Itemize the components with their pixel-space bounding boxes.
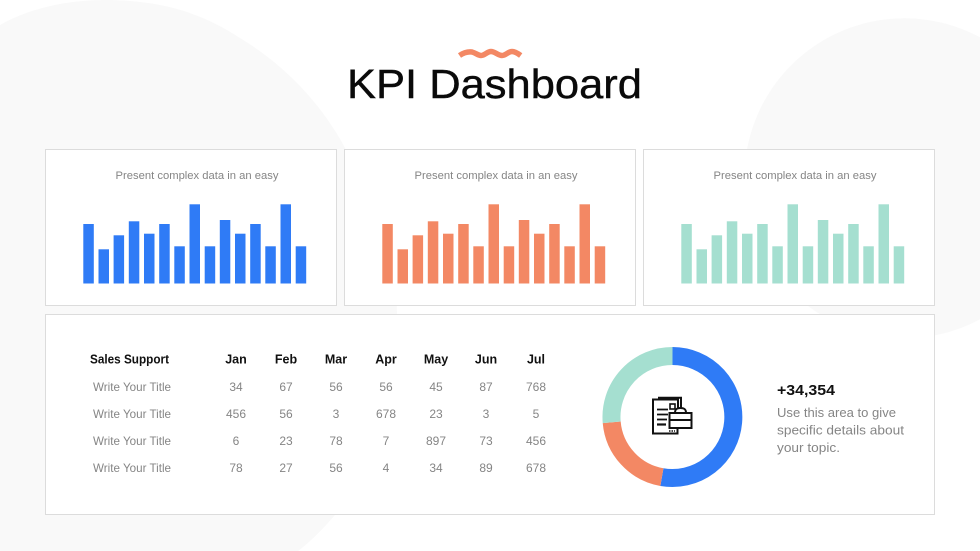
- table row 1: 87: [479, 380, 493, 394]
- table header row: Feb: [275, 352, 297, 366]
- table header row: May: [424, 352, 448, 366]
- table row 4: 27: [279, 461, 293, 475]
- table header row: Apr: [375, 352, 397, 366]
- icon: document and briefcase: [653, 398, 692, 434]
- table header row: Jul: [527, 352, 545, 366]
- panel: sales table and donut: [46, 314, 934, 514]
- table row 3: 7: [383, 434, 390, 448]
- panel: teal bar chart: [644, 150, 934, 306]
- table row 1: 56: [329, 380, 343, 394]
- callout: value and details: your topic.: [777, 440, 840, 455]
- table header row: Jun: [475, 352, 497, 366]
- table row 2: 3: [333, 407, 340, 421]
- table row 2: 5: [533, 407, 540, 421]
- table row 4: Write Your Title: [93, 461, 171, 475]
- panel caption: Present complex data in an easy: [714, 170, 877, 182]
- table row 3: 78: [329, 434, 343, 448]
- table row 3: 897: [426, 434, 446, 448]
- table row 1: 45: [429, 380, 443, 394]
- table row 2: 3: [483, 407, 490, 421]
- table row 2: [93, 407, 540, 421]
- table row 3: 73: [479, 434, 493, 448]
- bar chart: orange: [382, 204, 605, 284]
- table row 4: 89: [479, 461, 493, 475]
- table row 4: 4: [383, 461, 390, 475]
- table row 2: 456: [226, 407, 246, 421]
- table row 1: 34: [229, 380, 243, 394]
- donut chart: [611, 356, 733, 478]
- title: KPI Dashboard: [347, 61, 642, 107]
- table row 4: 34: [429, 461, 443, 475]
- table row 4: [93, 461, 546, 475]
- table: sales support: [90, 352, 546, 475]
- panel: blue bar chart: [46, 150, 336, 306]
- table row 1: Write Your Title: [93, 380, 171, 394]
- table row 4: 56: [329, 461, 343, 475]
- callout: value and details: Use this area to give: [777, 405, 896, 420]
- table header row: Mar: [325, 352, 347, 366]
- table row 2: 56: [279, 407, 293, 421]
- table row 1: 67: [279, 380, 293, 394]
- callout: value and details: +34,354: [777, 383, 835, 399]
- table row 2: 23: [429, 407, 443, 421]
- table row 3: Write Your Title: [93, 434, 171, 448]
- panel: orange bar chart: [344, 150, 636, 306]
- table header row: [90, 352, 545, 366]
- bar chart: teal: [681, 204, 904, 284]
- callout: value and details: specific details about: [777, 422, 904, 438]
- callout: value and details: [777, 383, 904, 455]
- background blob: right: [744, 18, 980, 338]
- panel caption: Present complex data in an easy: [116, 170, 279, 182]
- table row 3: 456: [526, 434, 546, 448]
- table row 3: 23: [279, 434, 293, 448]
- table row 3: 6: [233, 434, 240, 448]
- panel caption: Present complex data in an easy: [414, 170, 578, 182]
- table row 4: 678: [526, 461, 546, 475]
- table row 1: [93, 380, 546, 394]
- table row 3: [93, 434, 546, 448]
- table header row: Jan: [225, 352, 247, 366]
- table row 2: 678: [376, 407, 396, 421]
- decorative wave: [460, 52, 521, 56]
- table row 1: 56: [379, 380, 393, 394]
- bar chart: blue: [83, 204, 306, 284]
- table row 4: 78: [229, 461, 243, 475]
- table row 2: Write Your Title: [93, 407, 171, 421]
- table row 1: 768: [526, 380, 546, 394]
- table header row: Sales Support: [90, 352, 170, 366]
- background blob: left: [0, 0, 397, 551]
